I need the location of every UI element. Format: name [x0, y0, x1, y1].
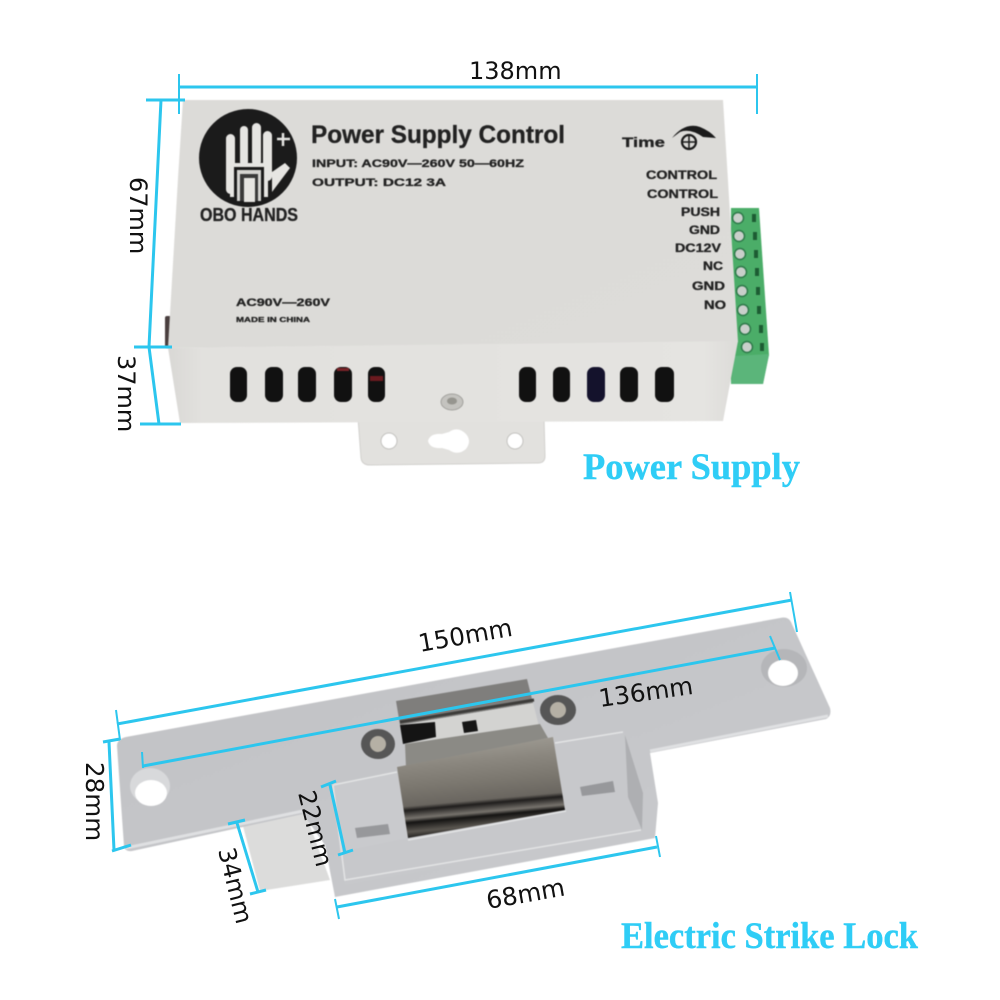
logo wordmark: OBO HANDS — [200, 205, 298, 225]
back mounting tab — [243, 812, 330, 891]
panel: power supply — [165, 100, 769, 465]
terminal labels: GND — [692, 281, 725, 293]
terminal labels: DC12V — [675, 243, 721, 255]
output spec: OUTPUT: DC12 3A — [312, 177, 446, 189]
power connector stub — [165, 316, 171, 348]
title: Power Supply: Power Supply — [583, 447, 800, 488]
terminal labels — [646, 170, 726, 312]
terminal labels: NO — [704, 300, 726, 312]
ventilation slots left — [230, 367, 385, 402]
enclosure front face — [168, 341, 738, 423]
dimension 68mm body: 68mm — [484, 873, 567, 915]
steel latch barrel — [397, 737, 565, 838]
dimension 150mm length: 150mm — [416, 613, 514, 658]
strike plate — [117, 618, 830, 897]
terminal labels: NC — [703, 261, 723, 273]
dimension 28mm plate width — [80, 739, 131, 851]
mounting screw — [441, 394, 463, 410]
enclosure top face — [168, 100, 738, 348]
plate screw left of mechanism — [361, 729, 395, 759]
dimension 37mm depth: 37mm — [112, 355, 140, 432]
terminal labels: PUSH — [681, 207, 720, 219]
dimensions: strike lock — [80, 592, 797, 926]
dimension 37mm depth — [112, 347, 181, 432]
time label: Time — [622, 134, 665, 150]
dimensions: power supply — [112, 57, 757, 432]
green terminal block — [731, 208, 769, 384]
ventilation slots right — [519, 367, 674, 402]
mounting hole right — [761, 649, 807, 687]
plate screw right of mechanism — [540, 695, 576, 725]
dimension 67mm height: 67mm — [124, 177, 152, 254]
dimension 136mm hole spacing — [142, 636, 780, 768]
title: Electric Strike Lock: Electric Strike Lock — [621, 916, 918, 957]
terminal labels: GND — [689, 225, 720, 237]
panel: electric strike lock — [117, 618, 830, 897]
input spec: INPUT: AC90V—260V 50—60HZ — [312, 158, 524, 170]
dimension 138mm width — [178, 57, 757, 114]
icon: OBO HANDS logo — [199, 109, 297, 207]
terminal labels: CONTROL — [646, 170, 717, 182]
icon: time dial — [672, 126, 716, 149]
dimension 28mm plate width: 28mm — [80, 762, 109, 841]
mounting hole left — [130, 768, 170, 806]
dimension 67mm height — [124, 100, 185, 347]
heading: Power Supply Control: Power Supply Control — [311, 121, 565, 149]
pocket recess — [333, 732, 643, 885]
dimension 138mm width: 138mm — [469, 57, 562, 85]
dimension 68mm body — [335, 836, 660, 919]
plate lower edge highlight — [126, 716, 828, 848]
dimension 136mm hole spacing: 136mm — [597, 671, 695, 713]
voltage label: AC90V—260V — [236, 297, 331, 309]
terminal labels: CONTROL — [647, 189, 718, 201]
dimension 34mm depth: 34mm — [212, 845, 258, 926]
dimension 22mm pocket: 22mm — [292, 788, 338, 869]
dimension 34mm depth — [212, 820, 266, 926]
mounting bracket — [358, 418, 545, 465]
dimension 22mm pocket — [292, 781, 353, 869]
upper mechanism window — [396, 679, 548, 768]
made in china label: MADE IN CHINA — [236, 317, 310, 324]
dimension 150mm length — [116, 592, 797, 740]
